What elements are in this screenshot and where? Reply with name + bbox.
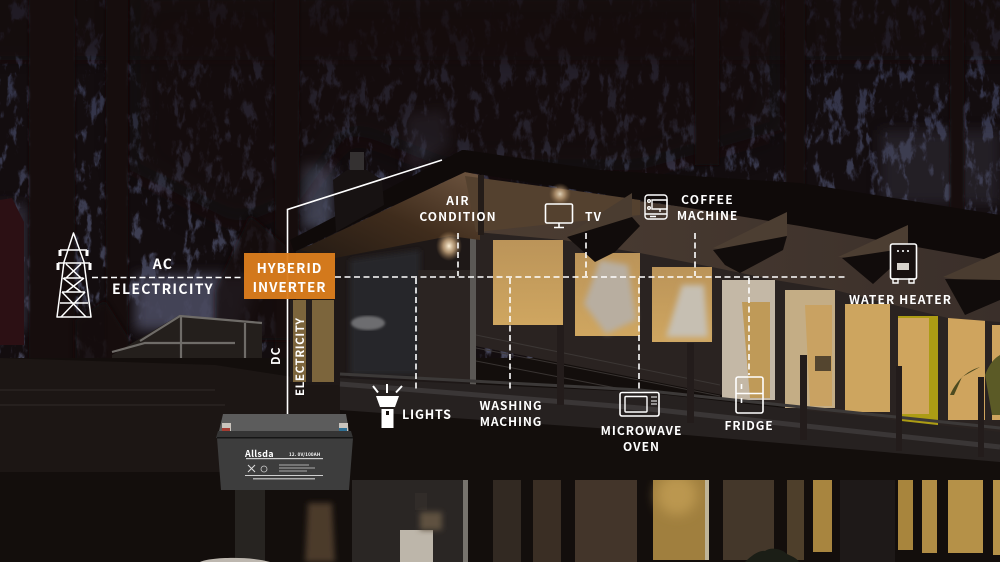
- label: TV: TV: [585, 208, 602, 225]
- icon: microwave oven: [620, 392, 659, 416]
- label: DC electricity: [267, 317, 308, 396]
- label: DC electricity: ELECTRICITY: [292, 317, 308, 396]
- icon: TV: [546, 204, 572, 228]
- label: washing machine: MACHING: [480, 413, 542, 430]
- label: microwave oven: MICROWAVE: [601, 422, 682, 439]
- icon: flashlight: [373, 384, 402, 428]
- label: coffee machine: [677, 191, 738, 224]
- label: lights: LIGHTS: [402, 404, 452, 423]
- DC line from battery: [288, 160, 442, 415]
- battery: Allsda: [244, 447, 274, 460]
- label: AC electricity: [112, 254, 214, 299]
- label: microwave oven: [601, 422, 682, 455]
- hybrid inverter box: INVERTER: [253, 276, 326, 296]
- label: washing machine: WASHING: [479, 397, 543, 414]
- label: AC electricity: AC: [152, 254, 173, 274]
- icon: water heater: [890, 244, 916, 283]
- battery: [216, 414, 353, 490]
- label: DC electricity: DC: [267, 347, 284, 365]
- house: roof and eaves: [290, 150, 1000, 322]
- label: air condition: [419, 192, 497, 225]
- label: air condition: AIR: [445, 192, 470, 209]
- hybrid inverter box: [244, 253, 335, 299]
- icon: power pylon: [57, 233, 91, 317]
- AC and load distribution lines: [92, 233, 848, 389]
- house: lower storey and deck: [0, 358, 1000, 562]
- icon: coffee machine: [645, 195, 667, 219]
- label: water heater: WATER HEATER: [849, 291, 952, 308]
- battery: 12. 0V/100AH: [289, 452, 320, 458]
- label: coffee machine: MACHINE: [677, 207, 738, 224]
- hybrid inverter box: HYBERID: [257, 257, 322, 277]
- label: air condition: CONDITION: [419, 208, 497, 225]
- label: coffee machine: COFFEE: [681, 191, 734, 208]
- house: upper storey wall and windows: [290, 190, 1000, 480]
- label: microwave oven: OVEN: [623, 438, 660, 455]
- label: AC electricity: ELECTRICITY: [112, 279, 214, 299]
- label: fridge: FRIDGE: [724, 417, 774, 434]
- icon: fridge: [736, 377, 763, 413]
- label: washing machine: [479, 397, 543, 430]
